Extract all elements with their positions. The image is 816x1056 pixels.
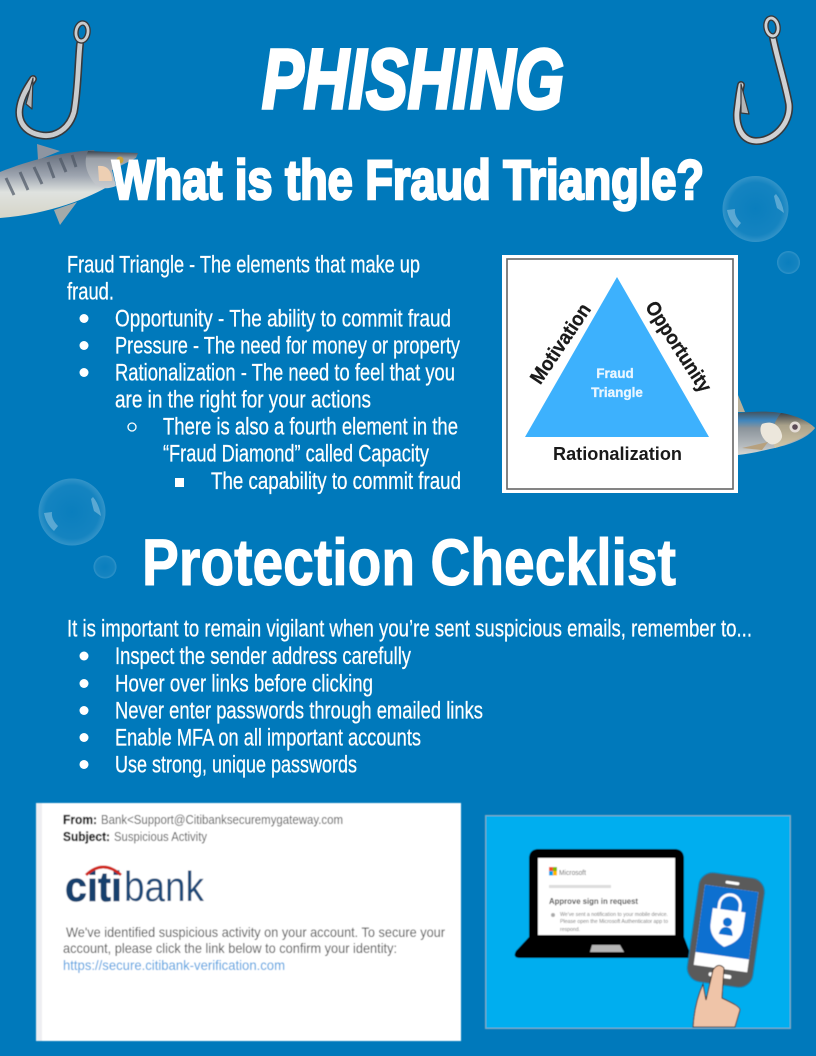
text block: protection checklist: Use strong, unique passwords [115, 752, 357, 778]
hand pointing [693, 965, 740, 1027]
email body [63, 924, 445, 973]
citibank logo: citi [65, 863, 122, 910]
heading: protection checklist: Protection Checklist [142, 525, 676, 599]
icon: small bubble left [94, 556, 116, 578]
laptop: respond. [560, 927, 580, 933]
laptop: Please open the Microsoft Authenticator app to [560, 919, 668, 925]
laptop: We've sent a notification to your mobile device. [560, 912, 668, 918]
icon: right hook [737, 17, 789, 141]
phone [686, 871, 766, 989]
text block: fraud triangle explanation [67, 252, 461, 495]
icon: large bubble right [722, 176, 788, 242]
icon: right fish [738, 395, 815, 455]
triangle caption [591, 366, 643, 400]
email header: Suspicious Activity [114, 830, 208, 844]
label: rationalization: Rationalization [553, 444, 682, 464]
email header [63, 813, 343, 844]
email header: From: [63, 813, 97, 827]
title: PHISHING [262, 32, 564, 126]
laptop [515, 849, 692, 958]
email header: Bank<Support@Citibanksecuremygateway.com [101, 813, 343, 827]
text block: protection checklist: Inspect the sender address carefully [115, 643, 411, 670]
panel: phishing email example [36, 803, 461, 1041]
text block: protection checklist [67, 616, 752, 778]
text block: fraud triangle explanation: Opportunity - The ability to commit fraud [115, 306, 451, 332]
icon: left fish [0, 144, 138, 225]
icon: small bubble right [777, 251, 800, 274]
text block: fraud triangle explanation: are in the right for your actions [115, 386, 371, 414]
label: motivation: Motivation [526, 300, 596, 388]
label: opportunity: Opportunity [640, 297, 716, 397]
laptop: Approve sign in request [549, 896, 638, 906]
text block: protection checklist: Never enter passwords through emailed links [115, 698, 483, 724]
text block: fraud triangle explanation: There is also a fourth element in the [163, 414, 458, 440]
triangle caption: Fraud [596, 366, 634, 381]
panel: fraud triangle diagram [502, 255, 738, 493]
email header: Subject: [63, 830, 110, 844]
email body: https://secure.citibank-verification.com [63, 957, 285, 973]
text block: fraud triangle explanation: Fraud Triangle - The elements that make up [67, 252, 420, 278]
text block: protection checklist: Hover over links before clicking [115, 670, 373, 698]
triangle [525, 277, 709, 437]
email body: account, please click the link below to confirm your identity: [63, 940, 397, 956]
icon: large bubble left [38, 478, 106, 546]
text block: fraud triangle explanation: Rationalization - The need to feel that you [115, 360, 455, 386]
laptop: Microsoft [559, 868, 587, 877]
panel: Microsoft authenticator MFA image [486, 816, 790, 1028]
text block: fraud triangle explanation: Pressure - The need for money or property [115, 332, 460, 360]
text block: protection checklist: Enable MFA on all important accounts [115, 724, 421, 752]
icon: left hook [19, 22, 89, 136]
citibank logo: bank [124, 863, 205, 910]
text block: fraud triangle explanation: The capability to commit fraud [211, 468, 461, 495]
text block: fraud triangle explanation: fraud. [67, 278, 114, 306]
text block: fraud triangle explanation: “Fraud Diamond” called Capacity [163, 440, 429, 468]
email body: We've identified suspicious activity on your account. To secure your [66, 924, 445, 940]
icon: padlock shield [708, 893, 748, 949]
citibank logo [65, 863, 205, 910]
triangle caption: Triangle [591, 385, 643, 400]
